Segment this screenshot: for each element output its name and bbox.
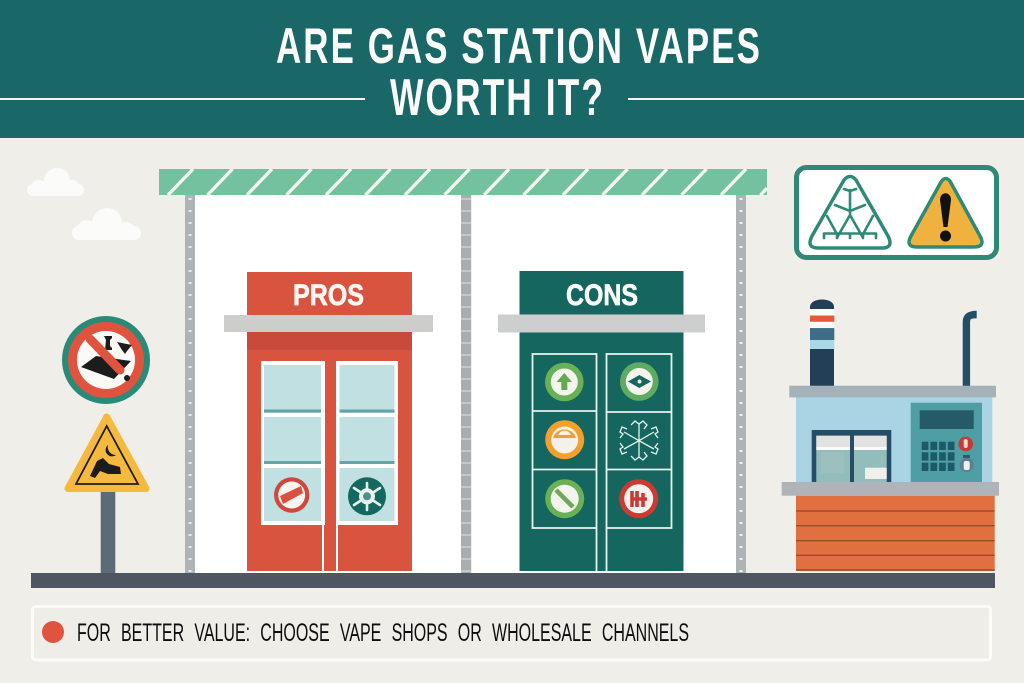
callout bar — [32, 606, 990, 660]
counter top slab — [782, 482, 999, 496]
callout text: FOR BETTER VALUE: CHOOSE VAPE SHOPS OR WHOLESALE CHANNELS — [77, 619, 689, 647]
icon: red dot — [42, 621, 64, 643]
icon: red symbol — [619, 479, 658, 518]
kiosk building — [782, 300, 999, 571]
icon: prohibition sign — [62, 316, 150, 404]
kiosk window — [812, 430, 891, 482]
panel: cons door — [498, 271, 705, 571]
kiosk wall — [796, 397, 992, 482]
icon: wheel — [348, 477, 386, 515]
ground floor strip — [31, 573, 995, 588]
warning signs panel — [796, 168, 996, 258]
vent pipe — [966, 314, 977, 386]
title: WORTH IT? — [390, 69, 605, 127]
icon: orange dome — [545, 420, 584, 459]
icon: exclamation triangle — [909, 178, 982, 247]
icon: no cigarette — [274, 477, 309, 513]
title — [276, 18, 762, 127]
icon: green diamond — [620, 362, 659, 401]
icon: cloud left lower — [72, 208, 141, 240]
window grid — [532, 354, 672, 571]
left window — [261, 361, 325, 525]
heading: cons: CONS — [566, 279, 638, 312]
sign post — [101, 492, 115, 573]
awning bar: pros — [224, 315, 433, 332]
chimney — [810, 300, 834, 386]
icon: green up arrow — [545, 363, 584, 401]
roof slab — [789, 386, 996, 397]
orange counter base — [796, 496, 995, 571]
icon: cloud left top — [27, 168, 84, 196]
title: ARE GAS STATION VAPES — [276, 18, 762, 74]
awning bar: cons — [498, 314, 705, 332]
heading: pros: PROS — [293, 279, 364, 312]
icon: caution triangle sign — [68, 417, 146, 488]
header banner — [0, 0, 1024, 138]
icon: snowflake outline — [620, 421, 658, 460]
panel: pros door — [224, 272, 433, 571]
icon: green slash — [545, 479, 584, 518]
striped awning — [159, 169, 767, 195]
right window — [336, 361, 398, 525]
icon: snowflake triangle — [810, 176, 890, 248]
payment panel — [911, 403, 982, 482]
gas station canopy building — [159, 169, 767, 573]
